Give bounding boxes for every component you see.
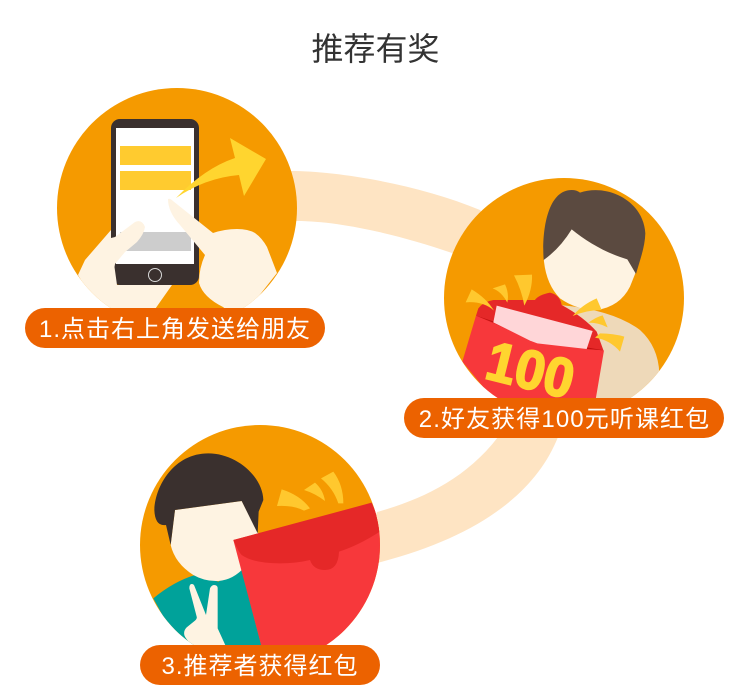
hair: [543, 190, 645, 274]
title: 推荐有奖: [311, 31, 440, 67]
label text 3: 3.推荐者获得红包: [161, 653, 359, 680]
icon: phone with hands: [78, 119, 277, 320]
confetti: [277, 472, 343, 511]
paper: [493, 306, 593, 349]
step 3 circle: [140, 425, 380, 665]
face: [544, 229, 636, 310]
envelope fold shadow right: [587, 347, 604, 350]
envelope front: [462, 316, 604, 403]
panel: step 1: [25, 88, 325, 348]
label pill 1: [25, 308, 325, 348]
label text 1: 1.点击右上角发送给朋友: [39, 316, 311, 343]
label pill 3: [140, 645, 380, 685]
victory hand: [184, 584, 226, 647]
hair: [154, 453, 263, 545]
label text 2: 2.好友获得100元听课红包: [419, 406, 710, 433]
panel: step 2: [404, 178, 724, 438]
phone body: [111, 119, 199, 285]
envelope flap: [476, 292, 604, 350]
face: [171, 501, 258, 581]
connecting band: [285, 171, 566, 563]
label pill 2: [404, 398, 724, 438]
envelope flap: [233, 503, 383, 570]
panel: step 3: [140, 425, 387, 685]
phone screen: [116, 128, 194, 264]
right hand: [168, 199, 277, 320]
screen bar 2: [120, 171, 191, 190]
shirt: [153, 570, 261, 645]
home button: [148, 268, 162, 282]
screen bar 1: [120, 146, 191, 165]
amount: 100: [480, 330, 580, 411]
left hand: [78, 221, 172, 312]
screen bar 3: [120, 232, 191, 251]
step 2 circle: [444, 178, 684, 418]
envelope fold shadow left: [477, 316, 494, 322]
confetti: [466, 275, 624, 352]
friend illustration: [462, 190, 659, 411]
envelope front: [233, 508, 380, 645]
icon: share arrow: [176, 138, 266, 198]
referrer illustration: [153, 453, 387, 653]
step 1 circle: [57, 88, 297, 328]
body: [560, 305, 659, 403]
